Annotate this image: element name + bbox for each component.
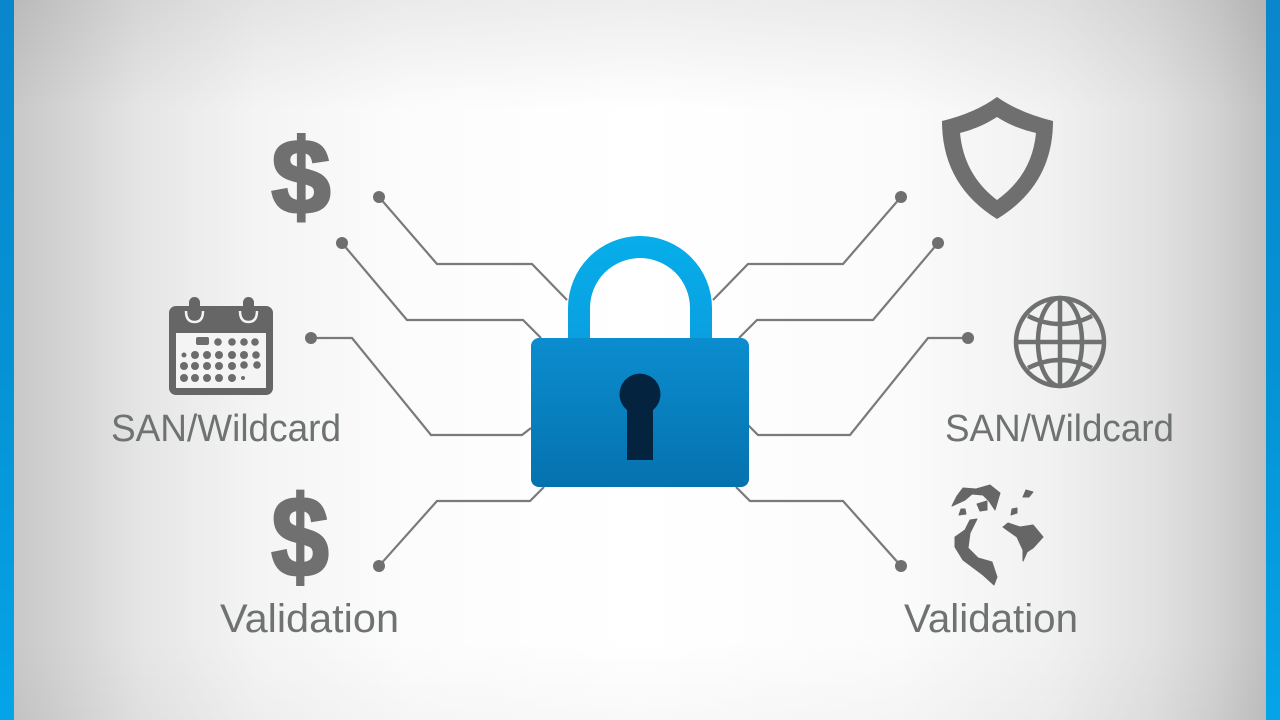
icon: globe <box>1016 298 1104 386</box>
label: Validation left: Validation <box>220 597 399 641</box>
label: SAN/Wildcard left: SAN/Wildcard <box>111 408 341 450</box>
padlock body <box>531 338 749 487</box>
icon: shield <box>942 97 1053 219</box>
icon: calendar <box>169 297 273 395</box>
padlock shackle <box>568 236 712 340</box>
label: Validation right: Validation <box>904 597 1078 641</box>
right blue edge bar <box>1266 0 1280 720</box>
connector lines left <box>305 191 567 572</box>
icon: world map fragments <box>952 485 1043 585</box>
keyhole <box>620 374 661 460</box>
icon: dollar sign bottom left: $ <box>271 474 329 601</box>
left blue edge bar <box>0 0 14 720</box>
label: SAN/Wildcard right: SAN/Wildcard <box>945 408 1174 450</box>
icon: dollar sign top left: $ <box>272 118 330 236</box>
central padlock <box>531 236 749 487</box>
connector lines right <box>713 191 974 572</box>
